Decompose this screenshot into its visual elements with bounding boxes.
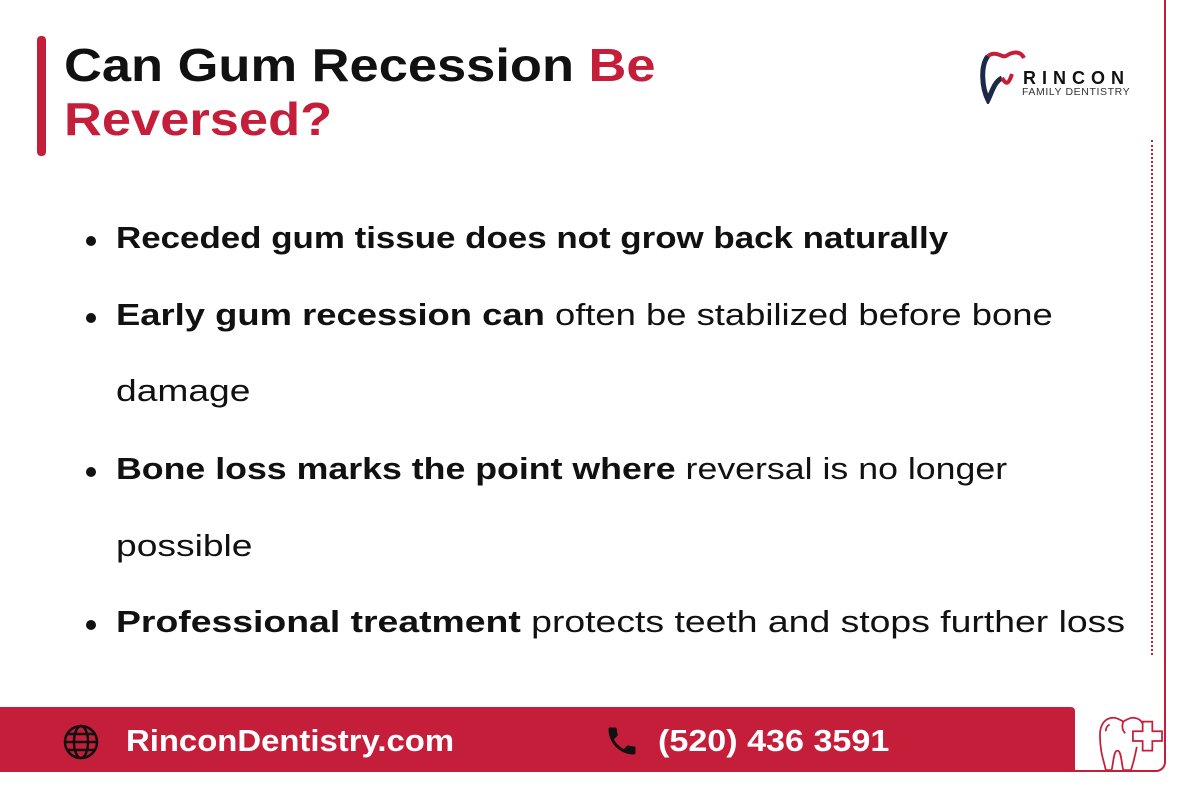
logo <box>980 50 1130 104</box>
title <box>64 39 656 145</box>
icon: globe <box>64 724 98 760</box>
bullet list: Early gum recession can often be stabilized before bone <box>116 297 1053 332</box>
bullet list: possible <box>116 528 252 563</box>
title: Reversed? <box>64 93 332 145</box>
bullet list: Bone loss marks the point where reversal is no longer <box>116 451 1007 486</box>
bullet list <box>86 220 1125 639</box>
right border frame <box>1070 0 1166 772</box>
website: RinconDentistry.com <box>126 723 454 758</box>
dotted line <box>1151 140 1153 655</box>
icon: phone <box>608 728 636 754</box>
title: Can Gum Recession Be <box>64 39 656 91</box>
bullet list: Professional treatment protects teeth and stops further loss <box>116 604 1125 639</box>
phone number: (520) 436 3591 <box>658 723 889 758</box>
footer bar <box>0 707 1075 772</box>
logo: RINCON <box>1023 68 1130 88</box>
icon: tooth with cross <box>1099 716 1163 770</box>
logo: FAMILY DENTISTRY <box>1022 86 1130 98</box>
bullet list: damage <box>116 373 250 408</box>
bullet list: Receded gum tissue does not grow back naturally <box>116 220 948 255</box>
title accent bar <box>37 36 46 156</box>
